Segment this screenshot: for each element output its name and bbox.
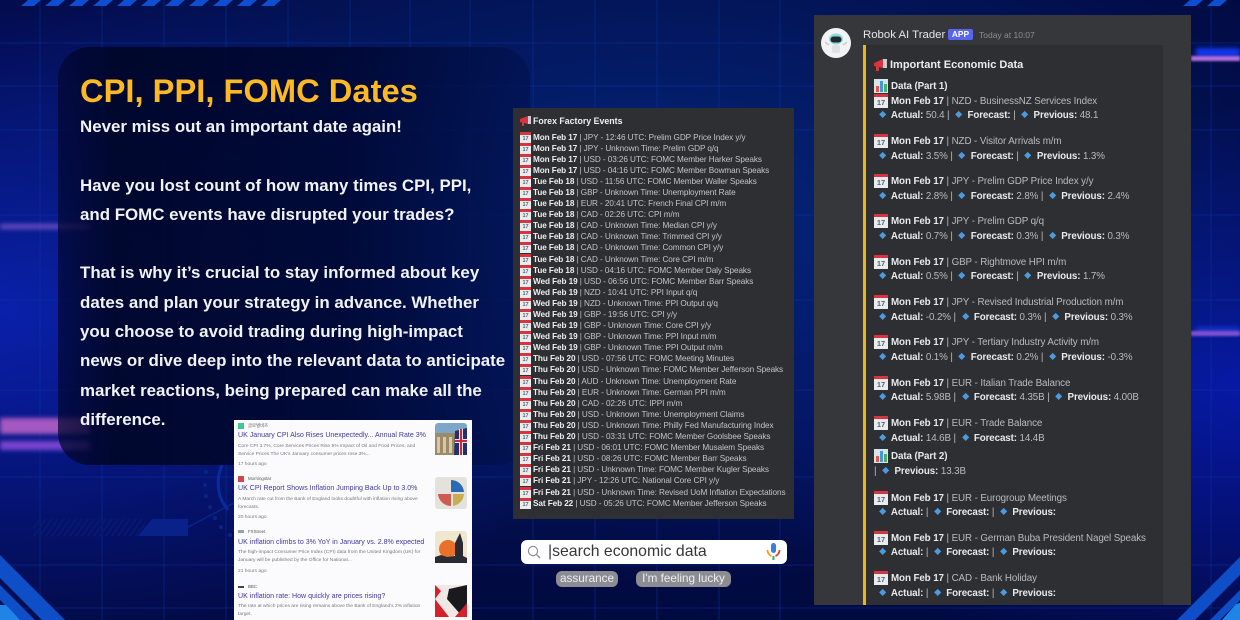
event rows: 17 bbox=[522, 446, 529, 452]
news item 2 bbox=[238, 476, 467, 520]
event rows: Tue Feb 18 | GBP - Unknown Time: Unemployment Rate bbox=[533, 188, 736, 197]
event: EUR Nagel: 17 bbox=[877, 535, 885, 544]
event rows: Tue Feb 18 | EUR - 20:41 UTC: French Final CPI m/m bbox=[533, 199, 726, 208]
text block: stay informed: news or dive deep into the relevant data to anticipate bbox=[80, 351, 505, 370]
event rows: 17 bbox=[522, 368, 529, 374]
event rows: 17 bbox=[522, 191, 529, 197]
text block: stay informed: That is why it’s crucial to stay informed about key bbox=[80, 263, 479, 282]
event rows: Thu Feb 20 | USD - Unknown Time: FOMC Member Jefferson Speaks bbox=[533, 365, 783, 374]
values: EUR Italian trade: Actual: 5.98B | Forecast: 4.35B | Previous: 4.00B bbox=[891, 392, 1139, 403]
values: EUR Nagel: Actual: | Forecast: | Previous: bbox=[891, 547, 1056, 558]
event rows: 17 bbox=[522, 457, 529, 463]
event rows: 17 bbox=[522, 224, 529, 230]
app badge bbox=[948, 29, 973, 40]
news item 2: A March rate cut from the Bank of England looks doubtful with inflation rising above bbox=[238, 497, 418, 502]
event: EUR Italian trade: Mon Feb 17 | EUR - Italian Trade Balance bbox=[891, 378, 1070, 389]
values: EUR eurogroup: Actual: | Forecast: | Previous: bbox=[891, 507, 1056, 518]
thumbnail: red graphic bbox=[435, 585, 467, 617]
event: JPY tertiary: Mon Feb 17 | JPY - Tertiary Industry Activity m/m bbox=[891, 337, 1099, 348]
event rows: 17 bbox=[522, 246, 529, 252]
event rows: Fri Feb 21 | USD - 06:01 UTC: FOMC Member Musalem Speaks bbox=[533, 443, 764, 452]
news item 1: Core CPI 3.7%, Core Services Prices Rise 5% Impact of Oil and Food Prices, and bbox=[238, 444, 415, 449]
event rows: Tue Feb 18 | CAD - Unknown Time: Core CPI m/m bbox=[533, 255, 713, 264]
news item 2: Morningstar bbox=[248, 476, 271, 481]
values: EUR trade balance: Actual: 14.6B | Forecast: 14.4B bbox=[891, 433, 1045, 444]
news item 4: UK inflation rate: How quickly are prices rising? bbox=[238, 593, 385, 600]
event rows: Fri Feb 21 | USD - 08:26 UTC: FOMC Member Barr Speaks bbox=[533, 454, 747, 463]
text block: stay informed: dates and plan your strategy in advance. Whether bbox=[80, 293, 479, 312]
values: JPY GDP: Actual: 0.7% | Forecast: 0.3% | Previous: 0.3% bbox=[891, 231, 1129, 242]
news item 3: UK inflation climbs to 3% YoY in January vs. 2.8% expected bbox=[238, 539, 424, 546]
event rows: Thu Feb 20 | USD - 07:56 UTC: FOMC Meeting Minutes bbox=[533, 354, 734, 363]
event rows: 17 bbox=[522, 158, 529, 164]
event: JPY GDP: Mon Feb 17 | JPY - Prelim GDP q/q bbox=[891, 216, 1044, 227]
event rows: 17 bbox=[522, 147, 529, 153]
event rows: Thu Feb 20 | USD - Unknown Time: Unemployment Claims bbox=[533, 410, 744, 419]
icon: megaphone bbox=[520, 116, 531, 126]
event: JPY industrial production: Mon Feb 17 | JPY - Revised Industrial Production m/m bbox=[891, 297, 1123, 308]
event rows: Wed Feb 19 | GBP - Unknown Time: PPI Input m/m bbox=[533, 332, 716, 341]
event rows: 17 bbox=[522, 424, 529, 430]
section: data part 2: Data (Part 2) bbox=[891, 451, 947, 462]
news item 4: The rate at which prices are rising remains above the Bank of England's 2% inflation bbox=[238, 604, 420, 609]
event rows: Wed Feb 19 | GBP - Unknown Time: Core CPI y/y bbox=[533, 321, 711, 330]
event rows: 17 bbox=[522, 291, 529, 297]
event: EUR eurogroup: Mon Feb 17 | EUR - Eurogroup Meetings bbox=[891, 493, 1067, 504]
event rows: 17 bbox=[522, 435, 529, 441]
text block: stay informed bbox=[80, 263, 505, 429]
event rows: 17 bbox=[522, 380, 529, 386]
values: JPY tertiary: Actual: 0.1% | Forecast: 0.2% | Previous: -0.3% bbox=[891, 352, 1132, 363]
text block: lost count question: and FOMC events have disrupted your trades? bbox=[80, 205, 454, 224]
event: EUR eurogroup: 17 bbox=[877, 495, 885, 504]
news item 1: 글로벌비즈 bbox=[248, 423, 268, 428]
event: EUR trade balance: Mon Feb 17 | EUR - Trade Balance bbox=[891, 418, 1042, 429]
event rows: Mon Feb 17 | USD - 03:26 UTC: FOMC Member Harker Speaks bbox=[533, 155, 762, 164]
event rows: Wed Feb 19 | NZD - 10:41 UTC: PPI Input q/q bbox=[533, 288, 697, 297]
news item 4 bbox=[238, 584, 467, 617]
panel: discord message bbox=[814, 15, 1191, 605]
panel: news search results bbox=[234, 420, 472, 620]
values: JPY price index: Actual: 2.8% | Forecast: 2.8% | Previous: 2.4% bbox=[891, 191, 1129, 202]
text block: stay informed: difference. bbox=[80, 410, 165, 429]
event rows: Thu Feb 20 | CAD - 02:26 UTC: IPPI m/m bbox=[533, 399, 682, 408]
section: data part 1: Data (Part 1) bbox=[891, 81, 947, 92]
icon: microphone bbox=[766, 543, 780, 560]
news item 4: target. bbox=[238, 612, 252, 617]
news item 2: forecasts. bbox=[238, 505, 259, 510]
button: assurance: assurance bbox=[560, 572, 614, 585]
event rows: Thu Feb 20 | USD - 03:31 UTC: FOMC Member Goolsbee Speaks bbox=[533, 432, 770, 441]
event rows: 17 bbox=[522, 213, 529, 219]
event: JPY industrial production: 17 bbox=[877, 299, 885, 308]
event rows: 17 bbox=[522, 202, 529, 208]
event rows bbox=[520, 132, 786, 509]
event: EUR Nagel: Mon Feb 17 | EUR - German Buba President Nagel Speaks bbox=[891, 533, 1146, 544]
event: CAD holiday: 17 bbox=[877, 575, 885, 584]
event rows: Mon Feb 17 | USD - 04:16 UTC: FOMC Member Bowman Speaks bbox=[533, 166, 769, 175]
news item 2: UK CPI Report Shows Inflation Jumping Back Up to 3.0% bbox=[238, 485, 417, 492]
event: EUR trade balance: 17 bbox=[877, 420, 885, 429]
values: JPY industrial production: Actual: -0.2% | Forecast: 0.3% | Previous: 0.3% bbox=[891, 312, 1132, 323]
app badge: APP bbox=[952, 29, 969, 39]
event rows: 17 bbox=[522, 302, 529, 308]
event rows: Sat Feb 22 | USD - 05:26 UTC: FOMC Member Jefferson Speaks bbox=[533, 499, 766, 508]
author name: Robok AI Trader bbox=[863, 29, 945, 41]
event rows: 17 bbox=[522, 346, 529, 352]
values: NZD visitors: Actual: 3.5% | Forecast: | Previous: 1.3% bbox=[891, 151, 1105, 162]
event rows: Mon Feb 17 | JPY - 12:46 UTC: Prelim GDP Price Index y/y bbox=[533, 132, 746, 142]
event: NZD services: Mon Feb 17 | NZD - BusinessNZ Services Index bbox=[891, 96, 1097, 107]
event rows: 17 bbox=[522, 169, 529, 175]
values: CAD holiday: Actual: | Forecast: | Previous: bbox=[891, 588, 1056, 599]
news item 3: FXStreet bbox=[248, 529, 265, 534]
news item 2: 20 hours ago bbox=[238, 515, 267, 520]
subtitle: Never miss out an important date again! bbox=[80, 117, 402, 136]
event rows: 17 bbox=[522, 324, 529, 330]
news item 3: 21 hours ago bbox=[238, 569, 267, 574]
event rows: 17 bbox=[522, 413, 529, 419]
embed heading: Important Economic Data bbox=[890, 59, 1023, 71]
search query text: |search economic data bbox=[548, 543, 707, 560]
event rows: Fri Feb 21 | USD - Unknown Time: Revised UoM Inflation Expectations bbox=[533, 488, 786, 496]
event rows: Tue Feb 18 | USD - 04:16 UTC: FOMC Member Daly Speaks bbox=[533, 266, 751, 275]
icon: megaphone large bbox=[874, 59, 887, 71]
news item 4: BBC bbox=[248, 584, 257, 589]
section: data part 1 bbox=[874, 79, 947, 93]
event rows: Fri Feb 21 | USD - Unknown Time: FOMC Member Kugler Speaks bbox=[533, 465, 769, 474]
event rows: Tue Feb 18 | USD - 11:56 UTC: FOMC Member Waller Speaks bbox=[533, 177, 757, 186]
event rows: Tue Feb 18 | CAD - Unknown Time: Median CPI y/y bbox=[533, 221, 717, 230]
search bar bbox=[521, 540, 787, 564]
event rows: 17 bbox=[522, 258, 529, 264]
event rows: 17 bbox=[522, 280, 529, 286]
event rows: Tue Feb 18 | CAD - 02:26 UTC: CPI m/m bbox=[533, 210, 679, 219]
event: GBP HPI: Mon Feb 17 | GBP - Rightmove HPI m/m bbox=[891, 257, 1066, 268]
event rows: Tue Feb 18 | CAD - Unknown Time: Trimmed CPI y/y bbox=[533, 232, 722, 241]
event: JPY price index: 17 bbox=[877, 178, 885, 187]
news item 3: January will be published by the Office for National... bbox=[238, 558, 352, 563]
event rows: Wed Feb 19 | GBP - Unknown Time: PPI Output m/m bbox=[533, 343, 723, 352]
text block: stay informed: market reactions, being prepared can make all the bbox=[80, 381, 482, 400]
panel: embed with yellow border bbox=[863, 45, 1163, 605]
event rows: 17 bbox=[522, 391, 529, 397]
event rows: Thu Feb 20 | USD - Unknown Time: Philly Fed Manufacturing Index bbox=[533, 421, 774, 430]
event rows: Wed Feb 19 | NZD - Unknown Time: PPI Output q/q bbox=[533, 299, 718, 308]
button: i'm feeling lucky: I'm feeling lucky bbox=[642, 572, 725, 585]
event rows: 17 bbox=[522, 269, 529, 275]
event rows: 17 bbox=[522, 235, 529, 241]
panel: left intro text background bbox=[58, 47, 530, 465]
event rows: Wed Feb 19 | USD - 06:56 UTC: FOMC Member Barr Speaks bbox=[533, 277, 753, 286]
event rows: Mon Feb 17 | JPY - Unknown Time: Prelim GDP q/q bbox=[533, 144, 719, 153]
news item 1 bbox=[238, 423, 467, 467]
event: JPY tertiary: 17 bbox=[877, 339, 885, 348]
event rows: Fri Feb 21 | JPY - 12:26 UTC: National Core CPI y/y bbox=[533, 476, 719, 485]
event: NZD visitors: Mon Feb 17 | NZD - Visitor Arrivals m/m bbox=[891, 136, 1061, 147]
event rows: 17 bbox=[522, 479, 529, 485]
event rows: 17 bbox=[522, 490, 529, 496]
thumbnail: bank and flag bbox=[435, 423, 467, 455]
news item 3 bbox=[238, 529, 467, 574]
values: GBP HPI: Actual: 0.5% | Forecast: | Previous: 1.7% bbox=[891, 271, 1105, 282]
news item 1: Service Prices The UK's January consumer prices rose 3%... bbox=[238, 452, 370, 457]
event: NZD visitors: 17 bbox=[877, 138, 885, 147]
event rows: 17 bbox=[522, 502, 529, 508]
icon: robot avatar bbox=[821, 28, 851, 58]
text block: lost count question bbox=[80, 176, 471, 224]
event rows: 17 bbox=[522, 468, 529, 474]
event rows: 17 bbox=[522, 313, 529, 319]
icon: magnifier bbox=[528, 546, 540, 558]
event rows: 17 bbox=[522, 357, 529, 363]
event rows: 17 bbox=[522, 180, 529, 186]
thumbnail: big ben and sun bbox=[435, 531, 467, 563]
heading: forex factory events: Forex Factory Events bbox=[533, 116, 622, 126]
text block: stay informed: you choose to avoid trading during high-impact bbox=[80, 322, 463, 341]
event rows: Thu Feb 20 | EUR - Unknown Time: German PPI m/m bbox=[533, 388, 726, 397]
panel: forex factory events list bbox=[513, 108, 794, 519]
event: NZD services: 17 bbox=[877, 98, 885, 107]
news item 1: UK January CPI Also Rises Unexpectedly... Annual Rate 3% bbox=[238, 432, 426, 439]
event: EUR Italian trade: 17 bbox=[877, 380, 885, 389]
values: NZD services: Actual: 50.4 | Forecast: | Previous: 48.1 bbox=[891, 110, 1098, 121]
title: CPI, PPI, FOMC Dates bbox=[80, 72, 418, 109]
text block: lost count question: Have you lost count of how many times CPI, PPI, bbox=[80, 176, 471, 195]
event rows: Tue Feb 18 | CAD - Unknown Time: Common CPI y/y bbox=[533, 243, 723, 252]
event rows: Wed Feb 19 | GBP - 19:56 UTC: CPI y/y bbox=[533, 310, 677, 319]
event rows: 17 bbox=[522, 402, 529, 408]
event: GBP HPI: 17 bbox=[877, 259, 885, 268]
event rows: 17 bbox=[522, 136, 529, 142]
event: CAD holiday: Mon Feb 17 | CAD - Bank Holiday bbox=[891, 573, 1037, 584]
thumbnail: pie graphic bbox=[435, 477, 467, 509]
news item 1: 17 hours ago bbox=[238, 462, 267, 467]
event rows: Thu Feb 20 | AUD - Unknown Time: Unemployment Rate bbox=[533, 377, 736, 386]
news item 3: The high-impact Consumer Price Index (CPI) data from the United Kingdom (UK) for bbox=[238, 550, 420, 555]
event: JPY price index: Mon Feb 17 | JPY - Prelim GDP Price Index y/y bbox=[891, 176, 1093, 187]
values: previous 13.3B: | Previous: 13.3B bbox=[874, 466, 966, 477]
section: data part 2 bbox=[874, 449, 947, 463]
event rows: 17 bbox=[522, 335, 529, 341]
timestamp: Today at 10:07 bbox=[979, 30, 1035, 40]
event: JPY GDP: 17 bbox=[877, 218, 885, 227]
